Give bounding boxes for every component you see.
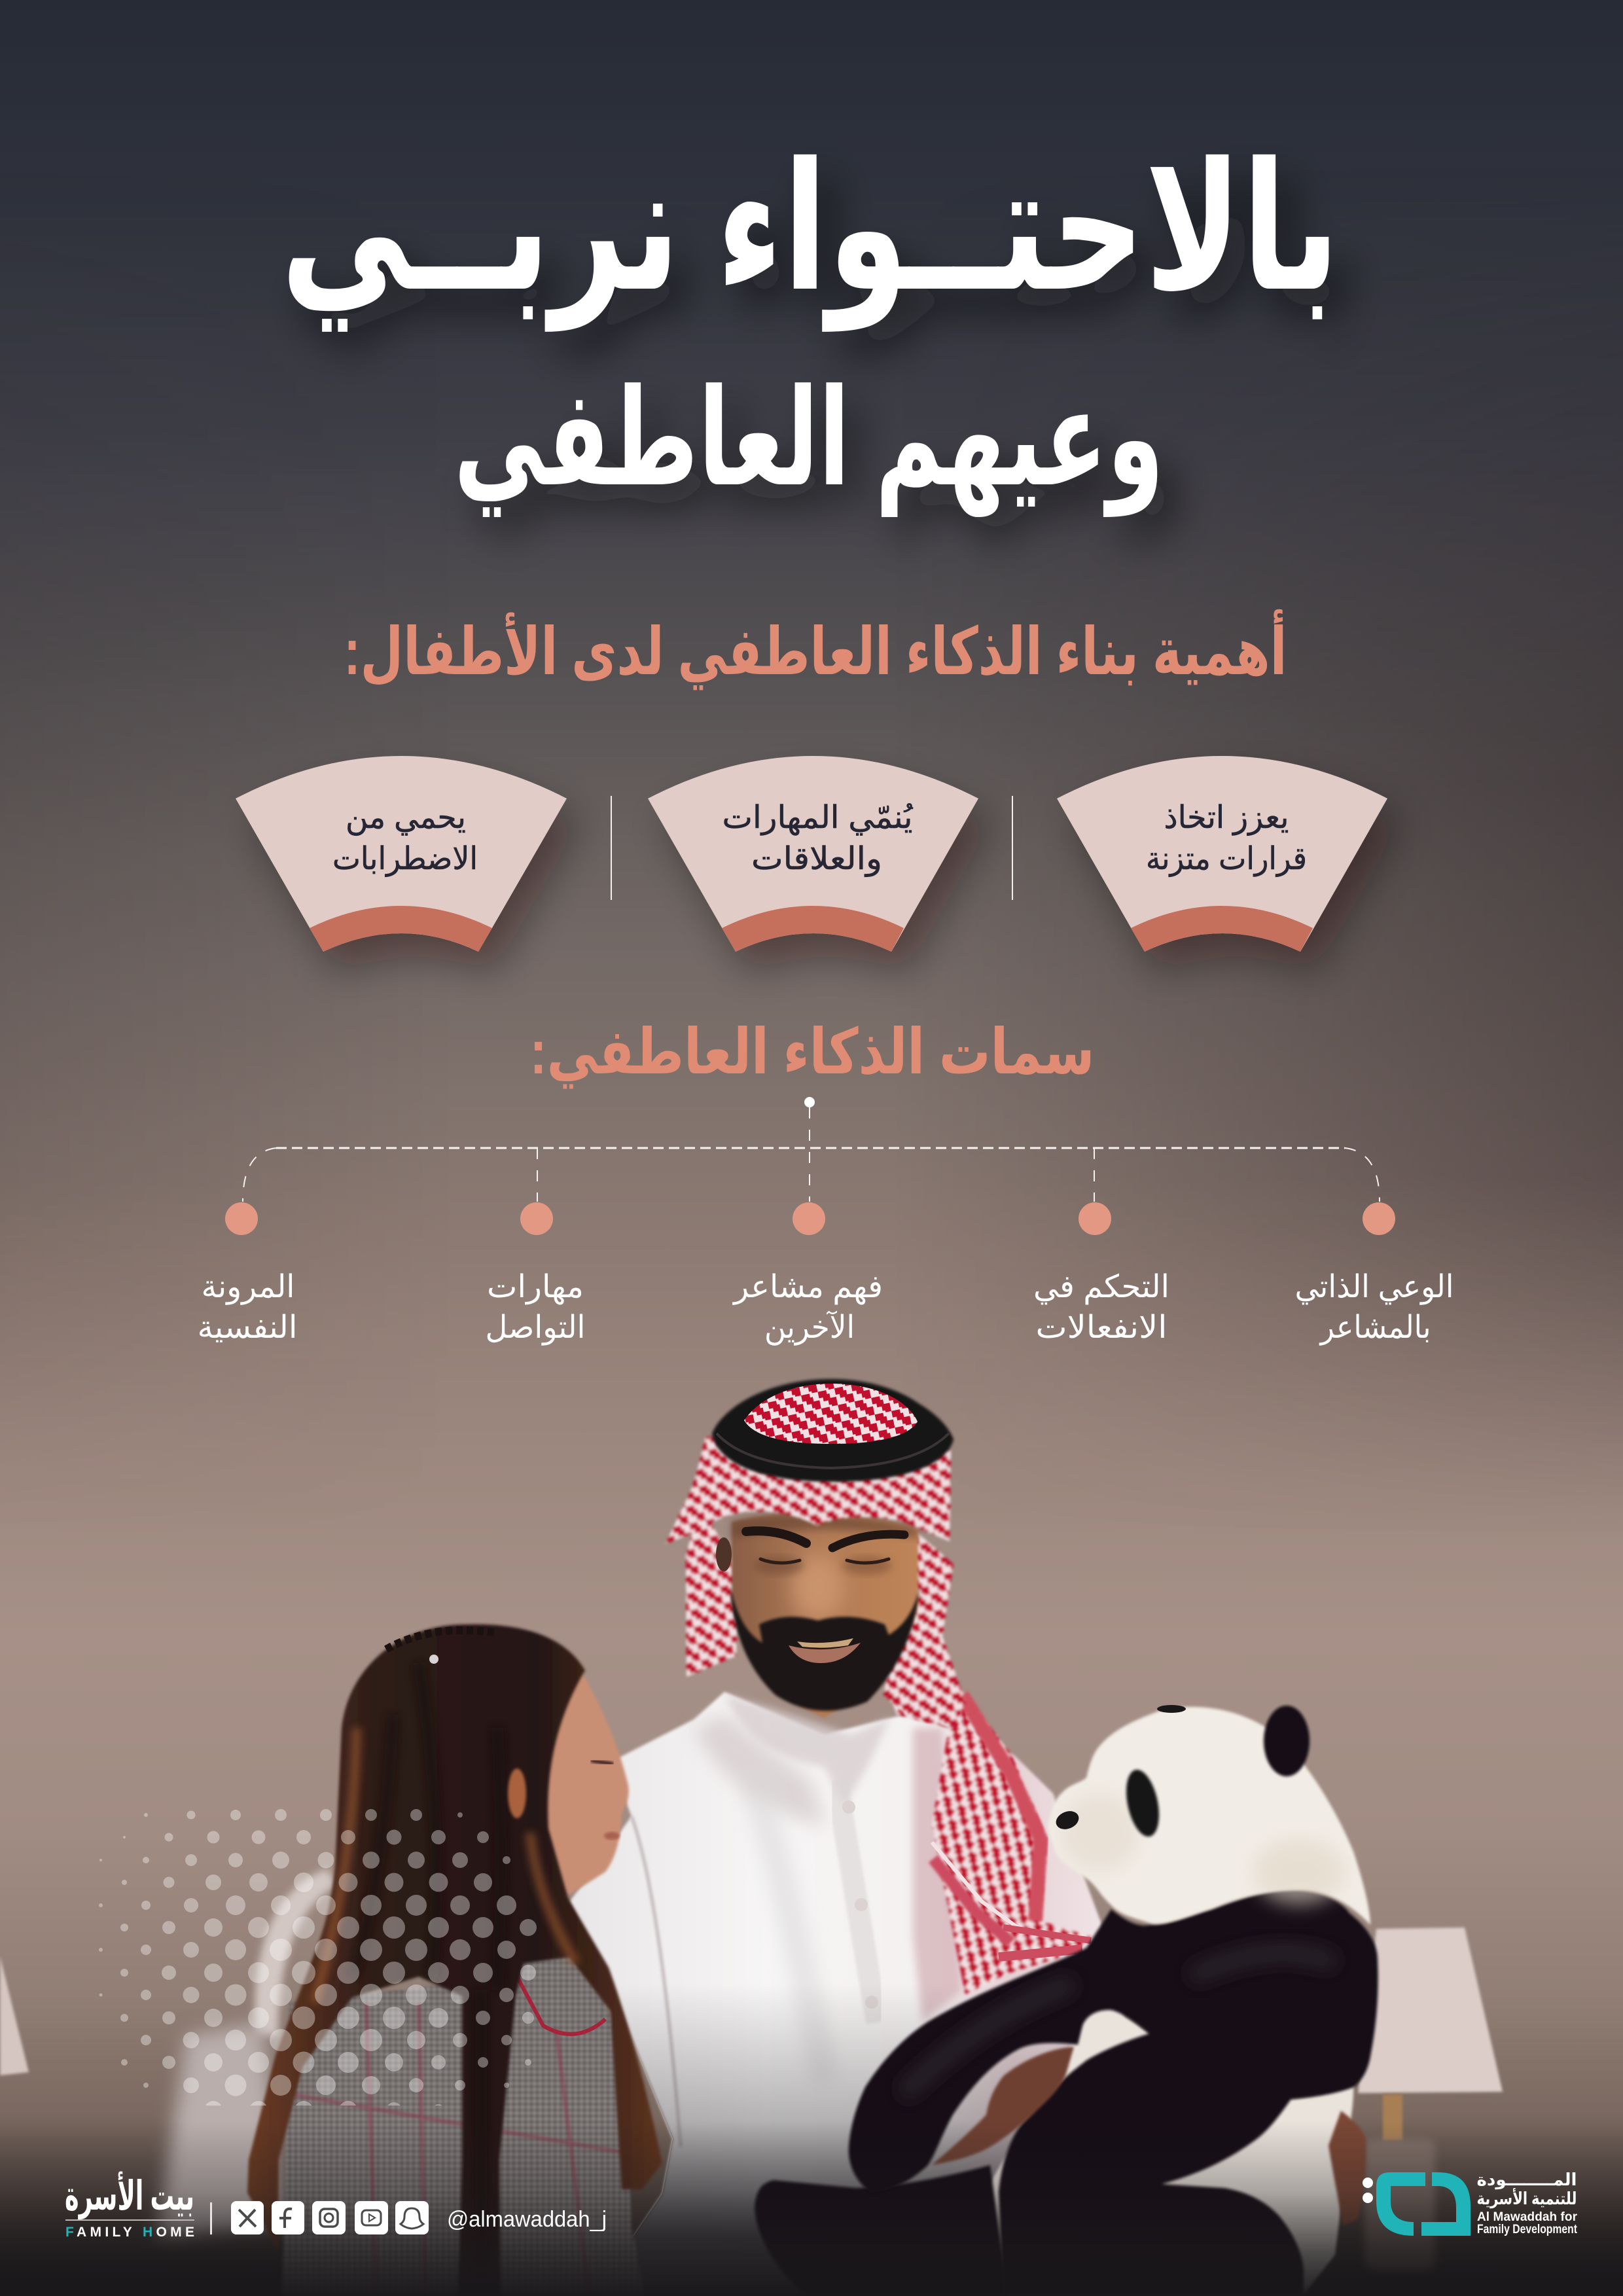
heading: importance of emotional intelligence: أهمية بناء الذكاء العاطفي لدى الأطفال: bbox=[344, 609, 1287, 691]
icon: youtube bbox=[355, 2201, 388, 2234]
man: eyes and brows bbox=[746, 1531, 904, 1563]
card: strengthens balanced decisions: قرارات متزنة bbox=[1146, 842, 1307, 877]
girl: dress bbox=[281, 1937, 645, 2296]
panda toy bbox=[755, 1705, 1378, 2296]
node: emotion control: التحكم في bbox=[1033, 1270, 1169, 1305]
node: emotion control bbox=[1033, 1202, 1169, 1345]
man: beard and smile bbox=[730, 1587, 919, 1711]
room: lamps and bed bbox=[0, 1869, 1503, 2270]
title bbox=[281, 130, 1340, 518]
panda: head bbox=[1048, 1707, 1370, 1925]
photo: father, daughter and panda bbox=[0, 1379, 1503, 2296]
girl: hair bbox=[247, 1624, 662, 2296]
card: strengthens balanced decisions bbox=[1057, 756, 1387, 952]
man: headband folds bbox=[666, 1437, 951, 1544]
node: understanding others bbox=[732, 1202, 883, 1346]
icon: x bbox=[231, 2201, 264, 2234]
node: psychological resilience: المرونة bbox=[202, 1270, 294, 1305]
footer: family home logo: بيت الأسرة bbox=[65, 2171, 194, 2219]
footer: al mawaddah logo: للتنمية الأسرية bbox=[1476, 2188, 1577, 2209]
footer: family home logo bbox=[65, 2171, 194, 2240]
halftone dots bbox=[99, 1809, 537, 2119]
man: agal ring and crown bbox=[712, 1379, 954, 1482]
heading: traits of emotional intelligence: سمات الذكاء العاطفي: bbox=[530, 1017, 1094, 1089]
card: protects from disorders: يحمي من bbox=[346, 800, 466, 836]
girl: face bbox=[510, 1662, 629, 1895]
icon: facebook bbox=[272, 2201, 304, 2234]
bottom dark fade bbox=[0, 2121, 1623, 2296]
title: وعيهم العاطفي bbox=[454, 363, 1164, 518]
tree diagram: traits bbox=[198, 1097, 1454, 1346]
man: head and face bbox=[666, 1379, 965, 1728]
card: develops skills and relationships: والعلاقات bbox=[751, 842, 882, 877]
node: communication skills bbox=[486, 1202, 585, 1346]
card: strengthens balanced decisions: يعزز اتخاذ bbox=[1164, 800, 1289, 836]
node: psychological resilience bbox=[198, 1202, 297, 1345]
card: protects from disorders: الاضطرابات bbox=[332, 842, 478, 877]
panda: white belly bbox=[988, 2010, 1353, 2296]
card: develops skills and relationships bbox=[648, 756, 978, 952]
footer: al mawaddah logo: المــــــــودة bbox=[1476, 2170, 1577, 2190]
footer: social icons bbox=[231, 2201, 429, 2234]
node: understanding others: فهم مشاعر bbox=[732, 1270, 883, 1305]
panda: hands bbox=[932, 2047, 1366, 2225]
node: self awareness bbox=[1294, 1202, 1454, 1346]
background vignette bbox=[0, 424, 1623, 1487]
node: self awareness: بالمشاعر bbox=[1319, 1310, 1431, 1346]
node: communication skills: مهارات bbox=[487, 1270, 584, 1305]
node: psychological resilience: النفسية bbox=[198, 1310, 297, 1345]
panel: benefit cards bbox=[236, 756, 1387, 952]
footer: family home logo: F AMILY H OME bbox=[65, 2225, 194, 2240]
footer: al mawaddah logo: Al Mawaddah for bbox=[1477, 2210, 1578, 2224]
connector lines bbox=[243, 1097, 1380, 1202]
man: thobe bbox=[569, 1692, 1126, 2296]
icon: instagram bbox=[312, 2201, 346, 2234]
node: communication skills: التواصل bbox=[486, 1310, 585, 1346]
footer: divider bbox=[210, 2202, 212, 2234]
node: understanding others: الآخرين bbox=[764, 1310, 855, 1346]
card: develops skills and relationships: يُنمّي المهارات bbox=[722, 800, 913, 836]
man: keffiyeh shawl bbox=[883, 1676, 1091, 1994]
icon: snapchat bbox=[395, 2201, 429, 2234]
panda: black body and limbs bbox=[755, 1890, 1378, 2296]
node: emotion control: الانفعالات bbox=[1035, 1310, 1168, 1345]
card: protects from disorders bbox=[236, 756, 567, 952]
footer: al mawaddah logo: Family Development bbox=[1477, 2223, 1578, 2236]
footer: al mawaddah logo bbox=[1363, 2170, 1578, 2236]
girl bbox=[247, 1624, 662, 2296]
footer: social handle: @almawaddah_j bbox=[447, 2207, 607, 2232]
icon: logo mark bbox=[1363, 2172, 1471, 2236]
node: self awareness: الوعي الذاتي bbox=[1294, 1270, 1454, 1305]
